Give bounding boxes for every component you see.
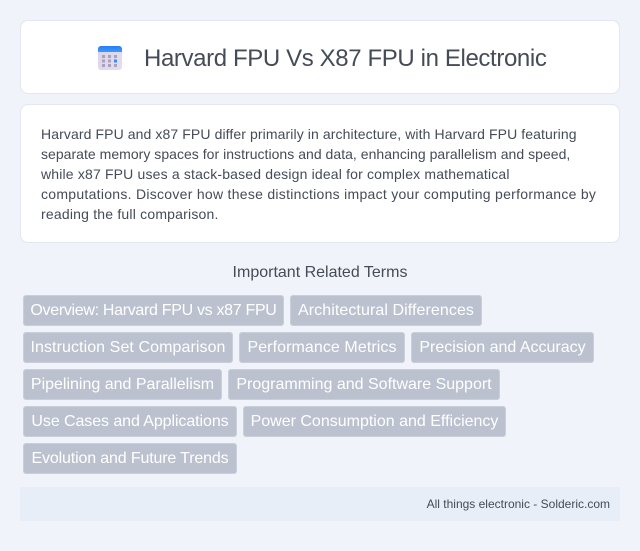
- tag: Instruction Set Comparison: [30, 339, 226, 356]
- tag: [23, 443, 237, 474]
- tag: Architectural Differences: [298, 302, 474, 319]
- tag: [243, 406, 506, 437]
- text block: description: [41, 126, 596, 222]
- tag: [239, 332, 405, 363]
- tag: [23, 406, 237, 437]
- footer credit: All things electronic - Solderic.com: [427, 497, 610, 511]
- tag: [290, 295, 482, 326]
- text block: description: while x87 FPU uses a stack-based design ideal for complex mathematical: [41, 166, 510, 182]
- tag: [23, 332, 233, 363]
- tag: Use Cases and Applications: [31, 413, 229, 430]
- tag list: [23, 295, 594, 474]
- tag: Performance Metrics: [247, 339, 397, 356]
- tag: Precision and Accuracy: [419, 339, 586, 356]
- tag: Overview: Harvard FPU vs x87 FPU: [30, 302, 277, 319]
- footer: [20, 487, 620, 521]
- tag: Pipelining and Parallelism: [31, 376, 214, 393]
- text block: description: computations. Discover how these distinctions impact your computing performance by: [41, 186, 596, 202]
- text block: description: reading the full comparison.: [41, 206, 219, 222]
- title: Harvard FPU Vs X87 FPU in Electronic: [144, 45, 546, 72]
- text block: description: separate memory spaces for instructions and data, enhancing parallelism and speed,: [41, 146, 570, 162]
- panel: description: [20, 104, 620, 243]
- heading: important related terms: Important Related Terms: [233, 264, 407, 281]
- tag: [23, 369, 222, 400]
- tag: Power Consumption and Efficiency: [251, 413, 498, 430]
- panel: header: [20, 20, 620, 94]
- tag: [23, 295, 284, 326]
- tag: [228, 369, 500, 400]
- icon: calendar: [98, 46, 122, 70]
- tag: Evolution and Future Trends: [32, 450, 228, 467]
- tag: [411, 332, 594, 363]
- tag: Programming and Software Support: [236, 376, 492, 393]
- text block: description: Harvard FPU and x87 FPU differ primarily in architecture, with Harvard FPU featuring: [41, 126, 577, 142]
